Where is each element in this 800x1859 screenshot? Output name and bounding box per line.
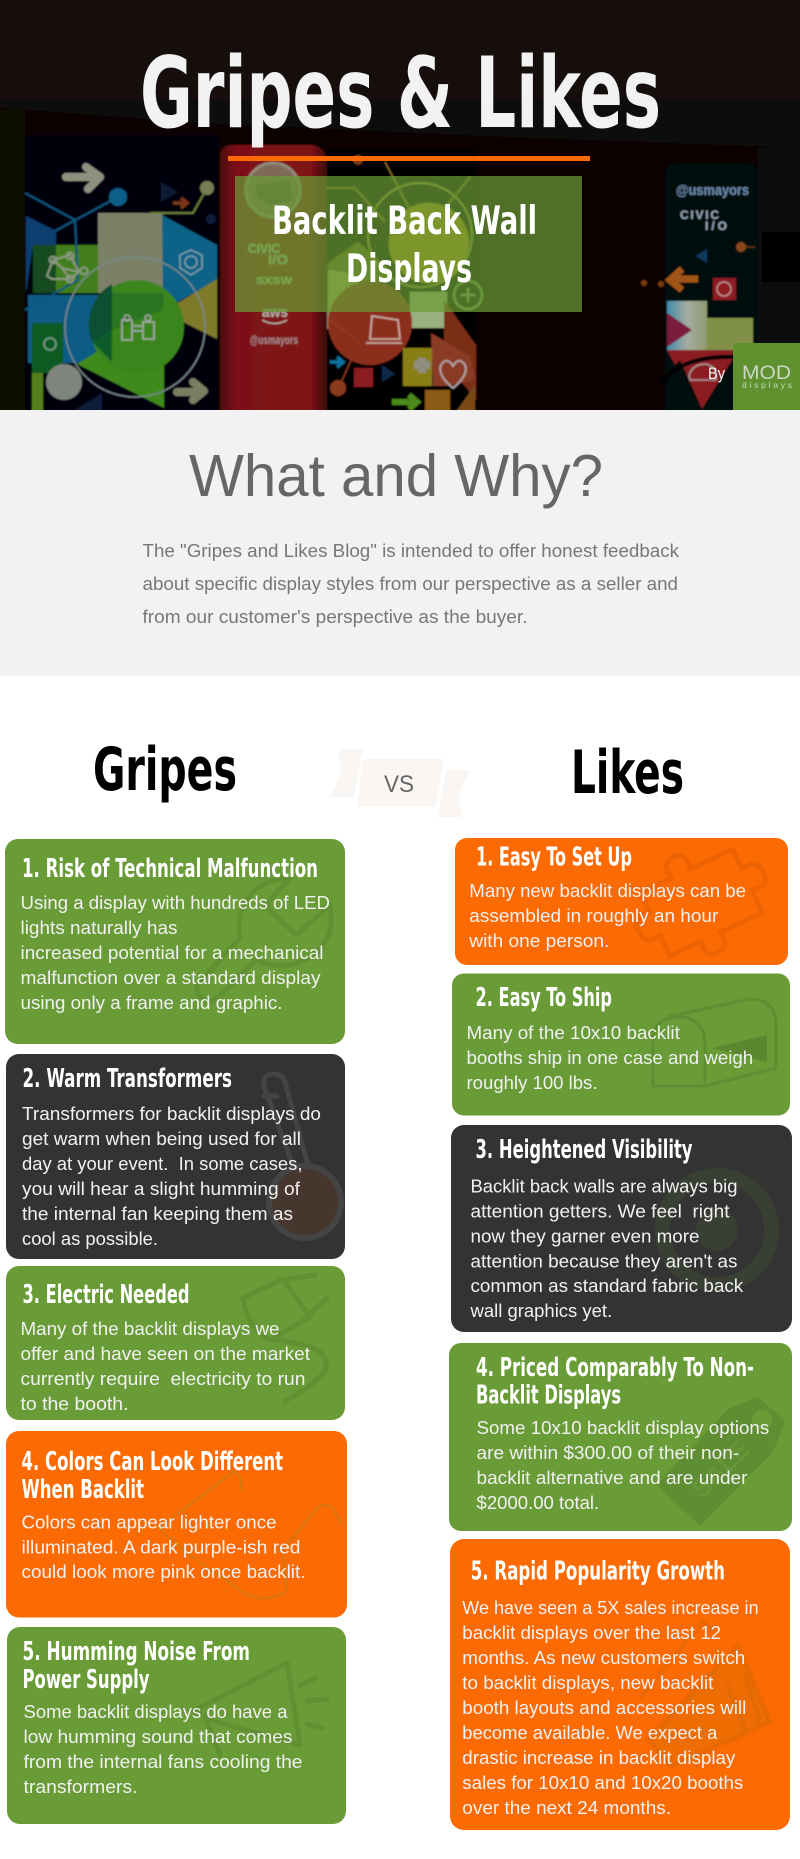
- like 3 title: 3. Heightened Visibility: [476, 1135, 692, 1165]
- like 1 text: with one person.: [468, 931, 609, 951]
- gripe 3 text: Many of the backlit displays we: [20, 1319, 280, 1339]
- hero background photo: backlit booths: I/O: [268, 252, 288, 267]
- column heading: likes: Likes: [571, 738, 684, 808]
- versus ribbon: [330, 749, 470, 817]
- MOD Displays logo: [733, 343, 800, 410]
- like 4 title: [476, 1353, 754, 1410]
- gripe 5 title: 5. Humming Noise From: [22, 1637, 250, 1667]
- gripe 1 text: malfunction over a standard display: [20, 968, 320, 988]
- gripe 5 text: from the internal fans cooling the: [24, 1752, 302, 1772]
- gripe 4 text: Colors can appear lighter once: [22, 1512, 276, 1532]
- like 4 text: Some 10x10 backlit display options: [476, 1418, 769, 1438]
- like 2 text: booths ship in one case and weigh: [466, 1048, 753, 1068]
- panel: what and why: [0, 410, 800, 676]
- gripe 3 title: 3. Electric Needed: [22, 1280, 190, 1310]
- intro paragraph: The "Gripes and Likes Blog" is intended to offer honest feedback: [142, 541, 680, 561]
- like 5 text: months. As new customers switch: [462, 1648, 745, 1668]
- subtitle box: Displays: [346, 247, 472, 292]
- panel: like 2: [452, 974, 790, 1116]
- like 2 text: roughly 100 lbs.: [466, 1073, 598, 1093]
- gripe 5 text: low humming sound that comes: [24, 1727, 292, 1747]
- like 1 title: 1. Easy To Set Up: [476, 842, 632, 872]
- gripe 4 title: 4. Colors Can Look Different: [22, 1447, 283, 1477]
- like 5 text: over the next 24 months.: [462, 1798, 671, 1818]
- hero background photo: backlit booths: @usmayors: [676, 182, 749, 199]
- gripe 1 text: Using a display with hundreds of LED: [20, 893, 330, 913]
- gripe 5 text: transformers.: [24, 1777, 138, 1797]
- gripe 1 text: using only a frame and graphic.: [20, 993, 282, 1013]
- like 5 text: [462, 1598, 759, 1818]
- like 5 text: to backlit displays, new backlit: [462, 1673, 713, 1693]
- panel: like 3: [451, 1125, 792, 1332]
- like 5 text: We have seen a 5X sales increase in: [462, 1598, 759, 1618]
- like 5 text: become available. We expect a: [462, 1723, 718, 1743]
- like 3 text: now they garner even more: [470, 1226, 700, 1246]
- like 3 text: attention because they aren't as: [470, 1252, 738, 1272]
- column heading: gripes: Gripes: [93, 735, 237, 805]
- byline: By: [708, 364, 725, 383]
- icon: wrench: [197, 878, 331, 1001]
- like 2 text: Many of the 10x10 backlit: [466, 1023, 680, 1043]
- gripe 1 title: 1. Risk of Technical Malfunction: [22, 854, 318, 884]
- icon: swatch cord: [160, 1472, 340, 1598]
- hero background photo: backlit booths: aws: [262, 304, 288, 321]
- like 3 text: attention getters. We feel right: [470, 1202, 730, 1222]
- subtitle box: Backlit Back Wall: [272, 199, 537, 244]
- gripe 3 text: currently require electricity to run: [20, 1369, 306, 1389]
- hero banner: [0, 0, 800, 420]
- like 2 text: [466, 1023, 753, 1093]
- gripe 4 text: illuminated. A dark purple-ish red: [22, 1538, 300, 1558]
- panel: gripe 3: [6, 1266, 345, 1420]
- gripe 2 title: 2. Warm Transformers: [22, 1064, 232, 1094]
- gripe 2 text: day at your event. In some cases,: [22, 1154, 302, 1174]
- panel: gripe 4: [6, 1431, 347, 1618]
- like 3 text: [469, 1176, 744, 1321]
- hero background photo: backlit booths: CIVIC: [248, 241, 281, 256]
- like 5 text: backlit displays over the last 12: [462, 1623, 721, 1643]
- intro paragraph: [142, 541, 680, 627]
- panel: like 5: [450, 1539, 790, 1830]
- icon: puzzle piece: [616, 825, 786, 979]
- panel: gripe 1: [5, 839, 345, 1044]
- like 3 text: common as standard fabric back: [470, 1276, 744, 1296]
- panel: like 4: [449, 1343, 792, 1531]
- like 4 text: are within $300.00 of their non-: [476, 1443, 739, 1463]
- like 5 text: booth layouts and accessories will: [462, 1698, 746, 1718]
- gripe 2 text: you will hear a slight humming of: [22, 1179, 301, 1199]
- intro paragraph: about specific display styles from our perspective as a seller and: [142, 574, 678, 594]
- versus ribbon: VS: [384, 771, 414, 798]
- hero background photo: backlit booths: I/O: [705, 219, 727, 233]
- like 2 title: 2. Easy To Ship: [476, 983, 612, 1013]
- MOD Displays logo: MOD: [742, 363, 791, 384]
- hero background photo: backlit booths: @usmayors: [250, 335, 298, 347]
- gripe 2 text: cool as possible.: [22, 1229, 158, 1249]
- MOD Displays logo: displays: [742, 380, 792, 390]
- gripe 2 text: [22, 1104, 321, 1249]
- like 4 title: Backlit Displays: [476, 1380, 621, 1410]
- like 5 text: sales for 10x10 and 10x20 booths: [462, 1773, 743, 1793]
- like 1 text: [468, 881, 746, 951]
- icon: building chart: [640, 1622, 770, 1767]
- gripe 3 text: to the booth.: [20, 1394, 128, 1414]
- gripe 1 text: increased potential for a mechanical: [20, 943, 324, 963]
- icon: megaphone: [193, 1663, 327, 1755]
- like 4 text: [476, 1418, 769, 1513]
- gripe 2 text: get warm when being used for all: [22, 1129, 301, 1149]
- gripe 2 text: Transformers for backlit displays do: [22, 1104, 321, 1124]
- gripe 3 text: [20, 1319, 310, 1414]
- hero background photo: backlit booths: SXSW: [256, 276, 293, 287]
- like 1 text: Many new backlit displays can be: [469, 881, 746, 901]
- like 4 text: $2000.00 total.: [476, 1493, 599, 1513]
- gripe 5 text: Some backlit displays do have a: [24, 1702, 289, 1722]
- section heading: What and Why?: [189, 443, 603, 509]
- gripe 4 text: [22, 1512, 306, 1582]
- like 3 text: wall graphics yet.: [469, 1301, 612, 1321]
- hero background photo: backlit booths: [0, 0, 800, 420]
- hero background photo: backlit booths: CIVIC: [680, 208, 719, 222]
- gripe 4 text: could look more pink once backlit.: [22, 1562, 306, 1582]
- intro paragraph: from our customer's perspective as the buyer.: [142, 607, 528, 627]
- gripe 1 text: lights naturally has: [20, 918, 178, 938]
- gripe 4 title: When Backlit: [22, 1475, 144, 1505]
- panel: gripe 2: [6, 1054, 345, 1259]
- like 4 text: backlit alternative and are under: [476, 1468, 748, 1488]
- panel: like 1: [455, 825, 788, 979]
- panel: gripe 5: [7, 1627, 346, 1824]
- icon: sale tag: SALE: [686, 1434, 756, 1504]
- gripe 5 text: [24, 1702, 302, 1797]
- gripe 4 title: [22, 1447, 283, 1505]
- icon: mailbox: [653, 999, 776, 1086]
- gripe 5 title: Power Supply: [22, 1665, 150, 1695]
- gripe 3 text: offer and have seen on the market: [20, 1344, 310, 1364]
- icon: thermometer: [264, 1074, 341, 1238]
- icon: target: [662, 1176, 772, 1284]
- gripe 5 title: [22, 1637, 250, 1695]
- gripe 2 text: the internal fan keeping them as: [22, 1204, 293, 1224]
- like 3 text: Backlit back walls are always big: [470, 1176, 738, 1196]
- icon: plug: [243, 1275, 327, 1401]
- gripe 1 text: [20, 893, 330, 1013]
- like 5 text: drastic increase in backlit display: [462, 1748, 735, 1768]
- orange divider bar: [228, 156, 590, 161]
- icon: sale tag: [657, 1397, 785, 1526]
- subtitle box: [235, 176, 582, 312]
- like 1 text: assembled in roughly an hour: [469, 906, 718, 926]
